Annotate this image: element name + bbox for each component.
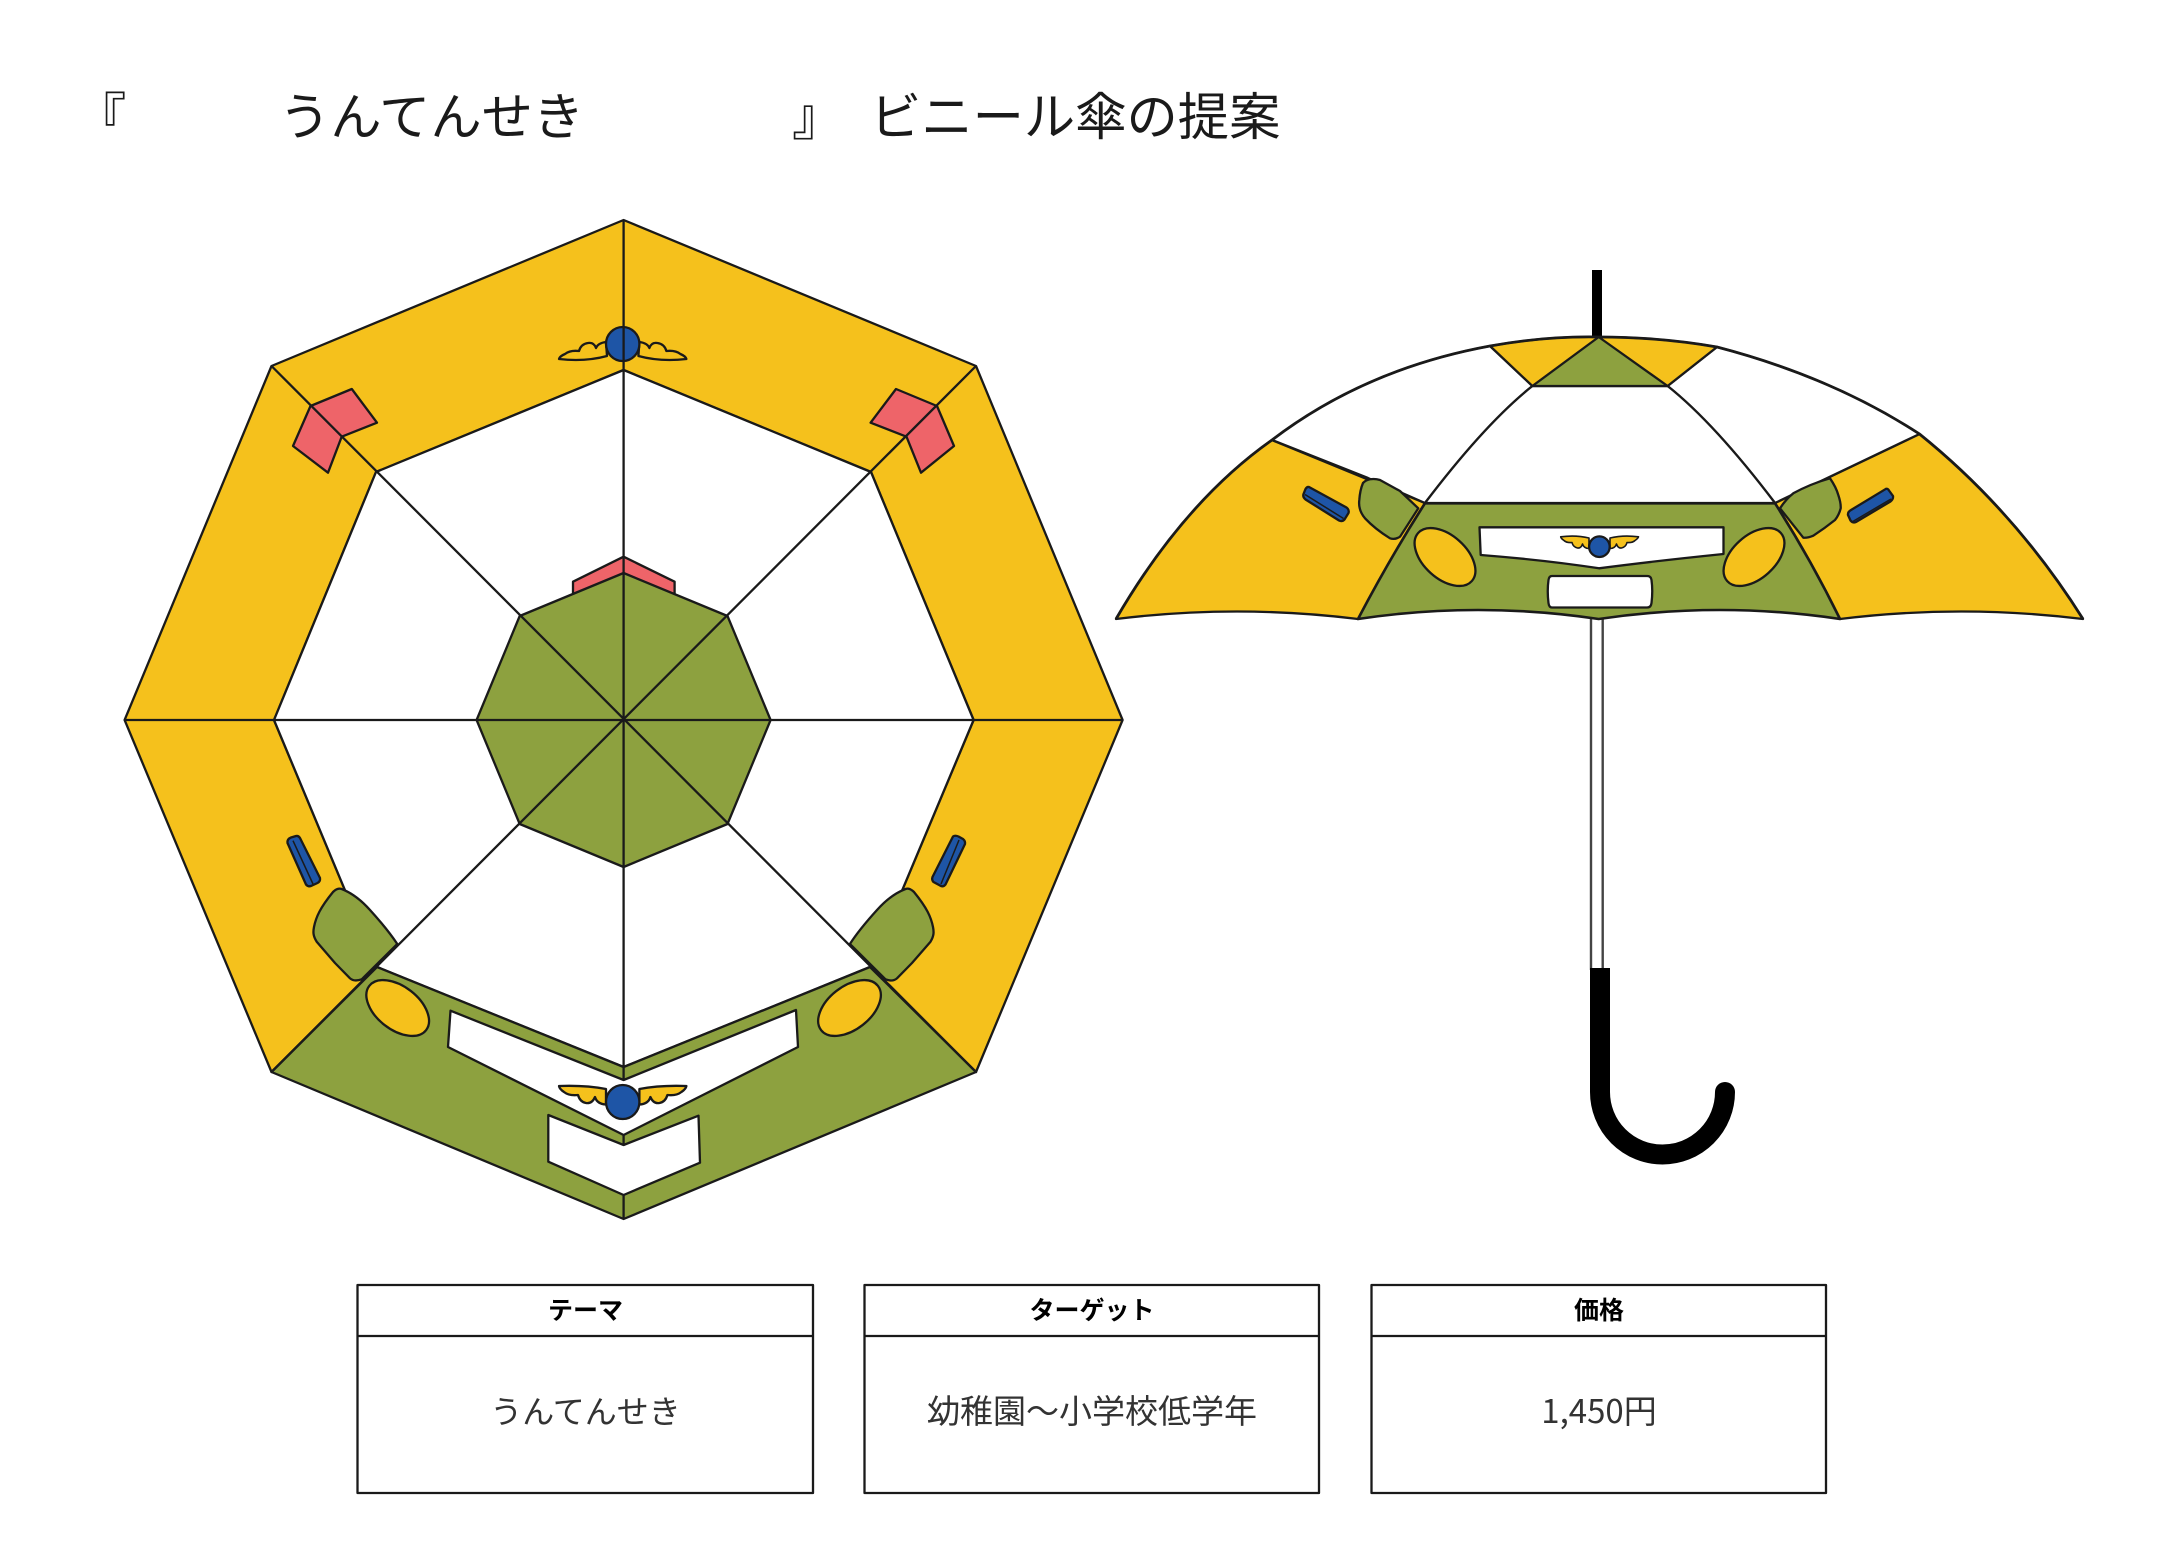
title: 』 <box>792 89 843 146</box>
target heading: ターゲット <box>1029 1297 1155 1325</box>
shaft <box>1591 619 1603 970</box>
headlight right <box>1713 517 1795 597</box>
panel: target <box>864 1285 1319 1493</box>
top green panel <box>1532 337 1668 386</box>
theme value: うんてんせき <box>490 1394 681 1430</box>
side view of umbrella <box>1116 270 2083 1154</box>
target value: 幼稚園～小学校低学年 <box>927 1393 1257 1430</box>
title <box>75 89 1280 146</box>
tip of umbrella <box>1592 270 1602 338</box>
pink tab on centre <box>573 557 675 596</box>
headlight left <box>356 969 439 1047</box>
panel: theme <box>358 1285 813 1493</box>
panel: price <box>1372 1285 1826 1493</box>
spokes <box>125 220 1123 1219</box>
green fender right <box>850 889 934 980</box>
title: ビニール傘の提案 <box>870 89 1280 146</box>
headlight right <box>808 969 891 1047</box>
emblem front <box>559 1085 686 1119</box>
white windscreen <box>1480 527 1724 568</box>
pink mirror right <box>871 389 954 473</box>
headlight left <box>1404 517 1486 597</box>
price value: 1,450円 <box>1541 1385 1657 1433</box>
pink mirror left <box>293 389 377 473</box>
green fender left <box>1359 479 1418 539</box>
white number plate <box>548 1115 700 1195</box>
canopy outline <box>1116 337 2083 619</box>
green centre octagon <box>477 573 771 867</box>
canopy white panels <box>1272 346 1532 503</box>
top view of umbrella <box>125 220 1123 1219</box>
yellow outer ring <box>125 220 1123 1072</box>
white windscreen band <box>448 1010 798 1135</box>
green fender right <box>1780 478 1841 538</box>
green front panel <box>1358 503 1840 619</box>
handle <box>1590 968 1725 1154</box>
theme heading: テーマ <box>548 1297 623 1325</box>
blue bar right <box>1848 489 1893 522</box>
canopy right yellow panel <box>1775 434 2083 619</box>
title: 『 <box>75 89 126 146</box>
green fender left <box>313 889 397 980</box>
emblem <box>1561 536 1638 557</box>
emblem rear <box>559 327 686 361</box>
white number plate <box>1548 576 1652 608</box>
blue bar left <box>1303 487 1349 521</box>
green front panel <box>272 967 976 1219</box>
canopy left yellow panel <box>1116 440 1425 619</box>
blue bar left <box>287 836 320 886</box>
blue bar right <box>932 836 965 886</box>
price heading: 価格 <box>1574 1297 1624 1325</box>
title: うんてんせき <box>279 89 584 146</box>
white inner ring <box>274 370 974 1067</box>
top yellow panel <box>1490 337 1717 386</box>
